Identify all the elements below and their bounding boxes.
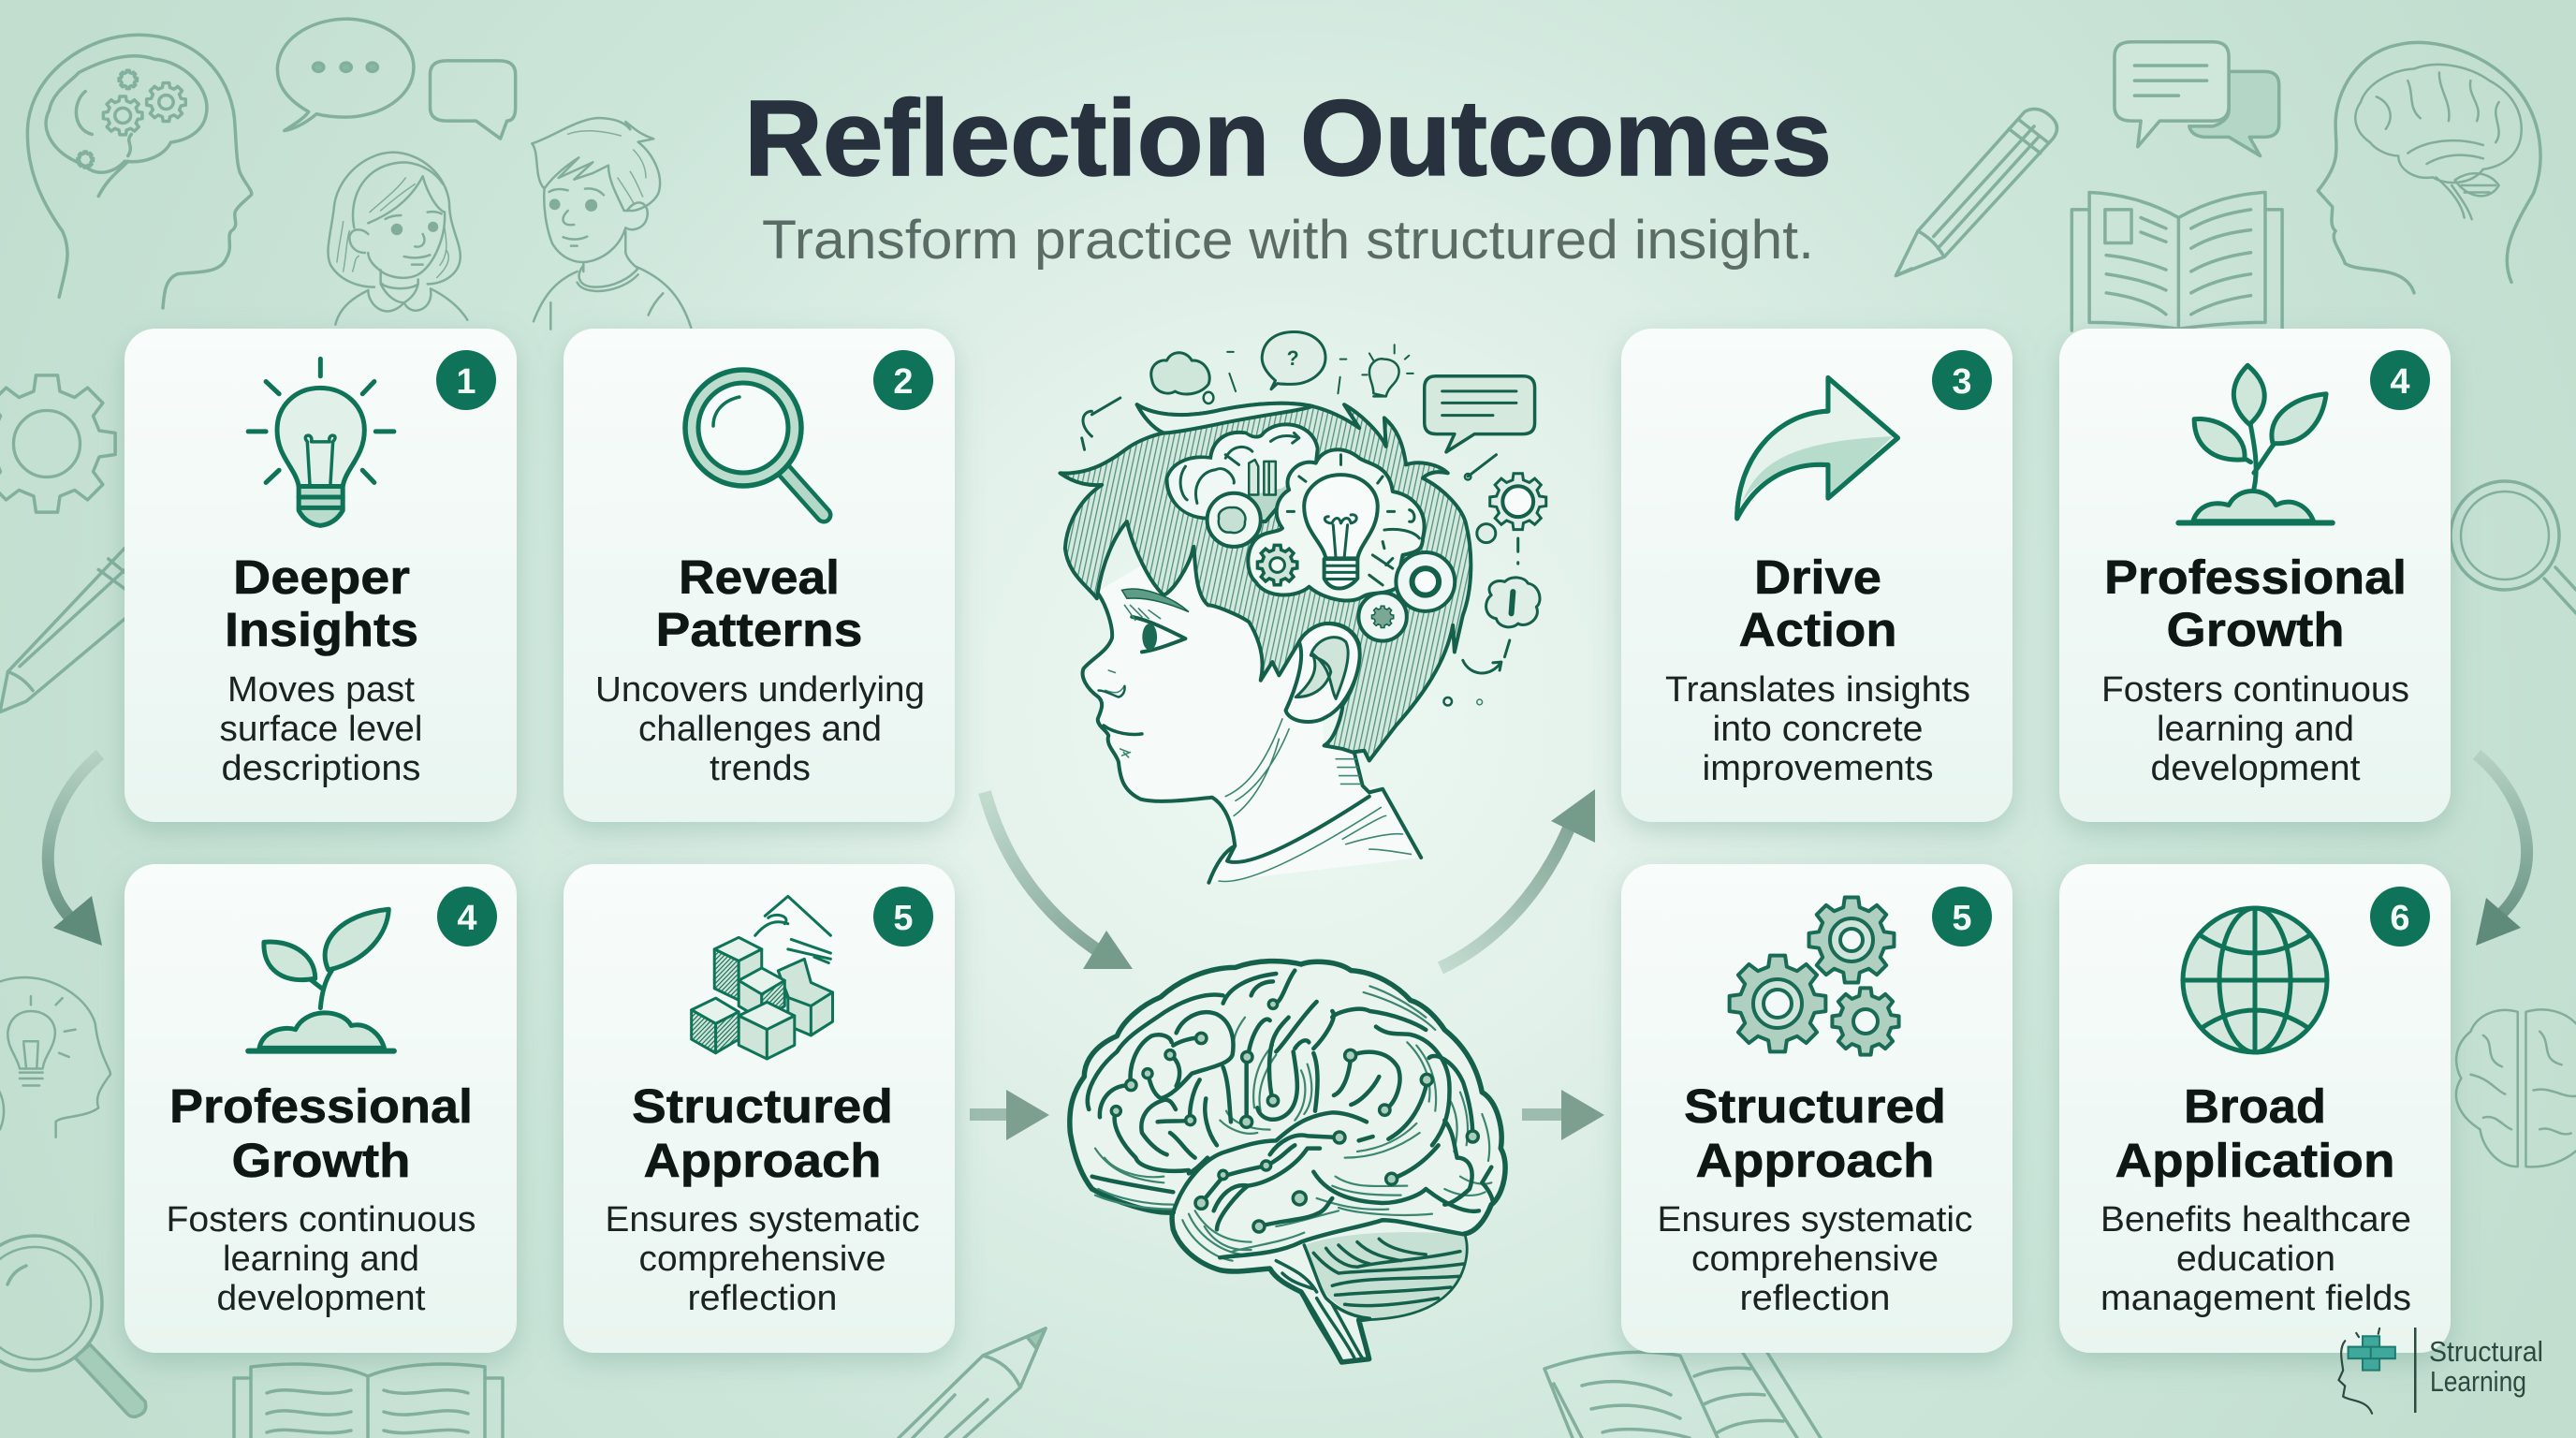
panel: Structured Approach (left) [564,864,955,1353]
heading: Broad [2184,1079,2326,1133]
body text: Ensures systematic [605,1200,919,1240]
body text [219,670,423,788]
thought clouds in hair [1167,424,1317,521]
icon: seedling with two leaves [248,909,394,1051]
gyri [1088,971,1493,1257]
face and shirt outline [1083,592,1421,883]
heading: Growth [2166,603,2344,656]
bulb in cloud [1304,475,1378,558]
heading: Deeper [233,550,410,604]
eye, brow, nose, mouth [1122,589,1189,612]
body text: surface level [219,710,423,749]
heading: Professional [169,1079,473,1133]
heading: Application [2115,1134,2394,1187]
number badge 6: 6 [2390,899,2410,938]
heading: Action [1739,603,1896,656]
heading [1739,550,1896,656]
background doodle: brain right [2456,1009,2576,1167]
icon: light bulb [248,359,394,525]
logo text: Structural [2429,1335,2543,1368]
body text: learning and [2157,710,2354,749]
logo divider [2414,1328,2417,1413]
number badge 5 [1932,887,1992,946]
icon: magnifying glass [685,370,824,515]
cerebellum and stem [1304,1232,1466,1318]
heading: Insights [225,603,418,656]
body text: into concrete [1713,710,1923,749]
background doodle: pencil left [0,548,170,712]
body text [167,1200,476,1318]
heading [632,1079,893,1187]
body text: reflection [687,1279,837,1318]
background doodle: gear left [0,375,115,512]
number badge 4 [2370,350,2430,410]
body text: Ensures systematic [1657,1200,1973,1240]
icon: gears [1730,898,1899,1055]
icon: globe [2183,908,2327,1052]
heading [225,550,418,656]
heading: Drive [1754,550,1881,604]
number badge 5 [873,887,933,946]
small icons above head [1151,331,1413,404]
heading [655,550,863,656]
heading: Approach [1696,1134,1934,1187]
background doodle: book bottom centre-right [1544,1348,1821,1438]
circuit nodes [1111,1000,1478,1232]
panel: Reveal Patterns [564,329,955,822]
subtitle: Transform practice with structured insight. [762,210,1814,271]
shading strokes [1095,986,1491,1261]
body text: trends [710,749,811,788]
ear [1286,624,1360,722]
background doodle: pencil bottom centre [899,1328,1046,1438]
body text: development [2151,749,2361,788]
heading: Structured [632,1079,893,1133]
background doodle: magnifier bottom left [0,1236,146,1416]
number badge 6 [2370,887,2430,946]
face and neck fill [1083,542,1421,883]
body text: Fosters continuous [2101,670,2409,710]
logo text [2429,1335,2543,1398]
heading [1684,1079,1946,1187]
number badge 5: 5 [1952,899,1972,938]
number badge 4: 4 [2390,362,2410,402]
icon: seedling with three leaves [2178,365,2333,523]
arrow: curved left [48,755,102,946]
icon: building blocks [692,896,833,1059]
body text: Benefits healthcare [2100,1200,2411,1240]
title: Reflection Outcomes [744,79,1832,198]
number badge 3 [1932,350,1992,410]
body text [595,670,925,788]
number badge 5: 5 [893,899,914,938]
body text: comprehensive [1691,1240,1939,1279]
arrow: curved right [2476,755,2527,946]
background doodle: chat bubbles top right [2115,42,2279,155]
heading [169,1079,473,1187]
heading [2104,550,2407,656]
background doodle: head with brain top right [2318,42,2540,293]
number badge 2 [873,350,933,410]
floating thought icons near head [1425,376,1535,452]
arrow: straight right of brain [1522,1090,1604,1140]
body text [1665,670,1970,788]
body text: challenges and [638,710,882,749]
heading: Reveal [679,550,840,604]
body text: development [217,1279,426,1318]
logo text: Learning [2430,1365,2526,1398]
body text: Moves past [227,670,415,710]
arrow: curved into brain [985,792,1133,969]
background doodle: head with gears, top left [27,35,252,308]
body text [1657,1200,1973,1318]
number badge 1: 1 [456,362,476,402]
body text: improvements [1702,749,1934,788]
background doodle: boy [532,118,691,330]
background doodle: book bottom left [234,1364,503,1438]
body text [2100,1200,2411,1318]
small icons above head: ? [1287,346,1299,370]
arrow: straight left of brain [970,1090,1049,1140]
heading: Growth [232,1134,410,1187]
body text: learning and [223,1240,419,1279]
panel: Drive Action [1621,329,2012,822]
body text: management fields [2100,1279,2411,1318]
body text [605,1200,919,1318]
body text: education [2176,1240,2335,1279]
panel: Structured Approach (right) [1621,864,2012,1353]
hair [1060,404,1471,760]
heading: Structured [1684,1079,1946,1133]
panel: Deeper Insights [124,329,517,822]
illustration: brain with circuit nodes [1070,961,1505,1362]
background doodle: head with light bulb left [0,977,110,1137]
number badge 2: 2 [893,362,914,402]
background doodle: magnifier right [2451,481,2576,613]
background doodle: open book top right [2071,192,2282,330]
arrow: curved out of brain [1441,789,1595,968]
number badge 4: 4 [457,899,477,938]
panel: Professional Growth (bottom) [124,864,517,1353]
background doodle: speech bubbles, top left [277,19,516,139]
body text: Translates insights [1665,670,1970,710]
heading: Patterns [655,603,863,656]
icon: arrow [1737,378,1897,519]
panel: Broad Application [2059,864,2451,1353]
body text: Uncovers underlying [595,670,925,710]
background doodle: girl [328,153,467,325]
body text: descriptions [221,749,421,788]
number badge 1 [436,350,496,410]
body text [2101,670,2409,788]
body text: comprehensive [638,1240,886,1279]
number badge 4 [437,887,497,946]
body text: Fosters continuous [167,1200,476,1240]
number badge 3: 3 [1952,362,1972,402]
heading: Professional [2104,550,2407,604]
logo icon: head with cross [2338,1328,2395,1414]
heading [2115,1079,2394,1187]
background doodle: pencil top right [1895,109,2056,275]
heading: Approach [644,1134,882,1187]
illustration: boy profile with thoughts [1060,331,1546,883]
logo: Structural Learning [2338,1328,2543,1414]
panel: Professional Growth (top) [2059,329,2451,822]
body text: reflection [1739,1279,1891,1318]
